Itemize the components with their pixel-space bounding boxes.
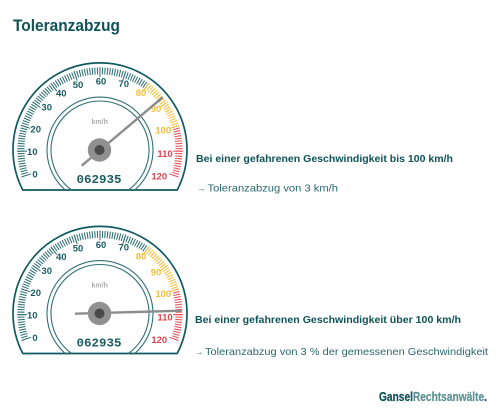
hub: [88, 302, 111, 325]
scale numbers: 30: [41, 266, 52, 277]
scale numbers: 90: [151, 104, 161, 115]
scale numbers: 120: [151, 335, 167, 346]
text: deduction 2: →: [196, 348, 204, 356]
scale numbers: 50: [73, 244, 83, 255]
scale numbers: 50: [73, 80, 83, 91]
scale numbers: 60: [96, 76, 106, 88]
unit label: km/h: [92, 119, 108, 126]
scale numbers: 60: [96, 240, 106, 251]
odometer: 062935: [76, 173, 122, 187]
inner rings: [47, 261, 153, 354]
scale numbers: [27, 76, 173, 182]
scale numbers: 100: [155, 126, 171, 136]
scale numbers: 70: [118, 243, 129, 254]
hub: [88, 138, 111, 162]
scale numbers: 30: [41, 102, 52, 114]
text: condition 2: Bei einer gefahrenen Geschwindigkeit über 100 km/h: [195, 314, 461, 326]
scale numbers: 70: [118, 79, 129, 90]
inner rings: [47, 97, 153, 190]
odometer: 062935: [76, 336, 122, 350]
scale numbers: 80: [136, 88, 146, 99]
scale numbers: 80: [136, 251, 146, 262]
scale numbers: 20: [30, 124, 41, 136]
scale numbers: 0: [32, 170, 38, 180]
outer dial frame: [13, 63, 187, 190]
text: deduction 1: →: [198, 184, 206, 193]
scale numbers: 10: [27, 147, 38, 158]
title: Toleranzabzug: [13, 16, 120, 35]
unit label: km/h: [92, 282, 108, 290]
gauge: speedometer 2: [13, 226, 187, 354]
outer dial frame: [13, 226, 187, 354]
needle: [82, 97, 163, 166]
text: deduction 1: Toleranzabzug von 3 km/h: [208, 182, 338, 194]
scale numbers: 0: [32, 333, 38, 344]
scale numbers: 90: [151, 268, 161, 279]
scale numbers: 100: [155, 289, 171, 300]
scale numbers: [27, 240, 173, 346]
text: condition 1: Bei einer gefahrenen Geschwindigkeit bis 100 km/h: [196, 153, 453, 165]
text: deduction 2: Toleranzabzug von 3 % der gemessenen Geschwindigkeit: [205, 346, 488, 358]
tick scale: [17, 67, 183, 177]
scale numbers: 40: [56, 252, 67, 263]
gauge: speedometer 1: [13, 63, 187, 190]
scale numbers: 10: [27, 310, 38, 321]
scale numbers: 40: [56, 88, 67, 100]
scale numbers: 120: [151, 172, 167, 182]
tick scale: [17, 230, 183, 340]
scale numbers: 110: [157, 312, 173, 323]
scale numbers: 110: [157, 149, 173, 160]
scale numbers: 20: [30, 288, 41, 299]
needle: [75, 311, 182, 314]
